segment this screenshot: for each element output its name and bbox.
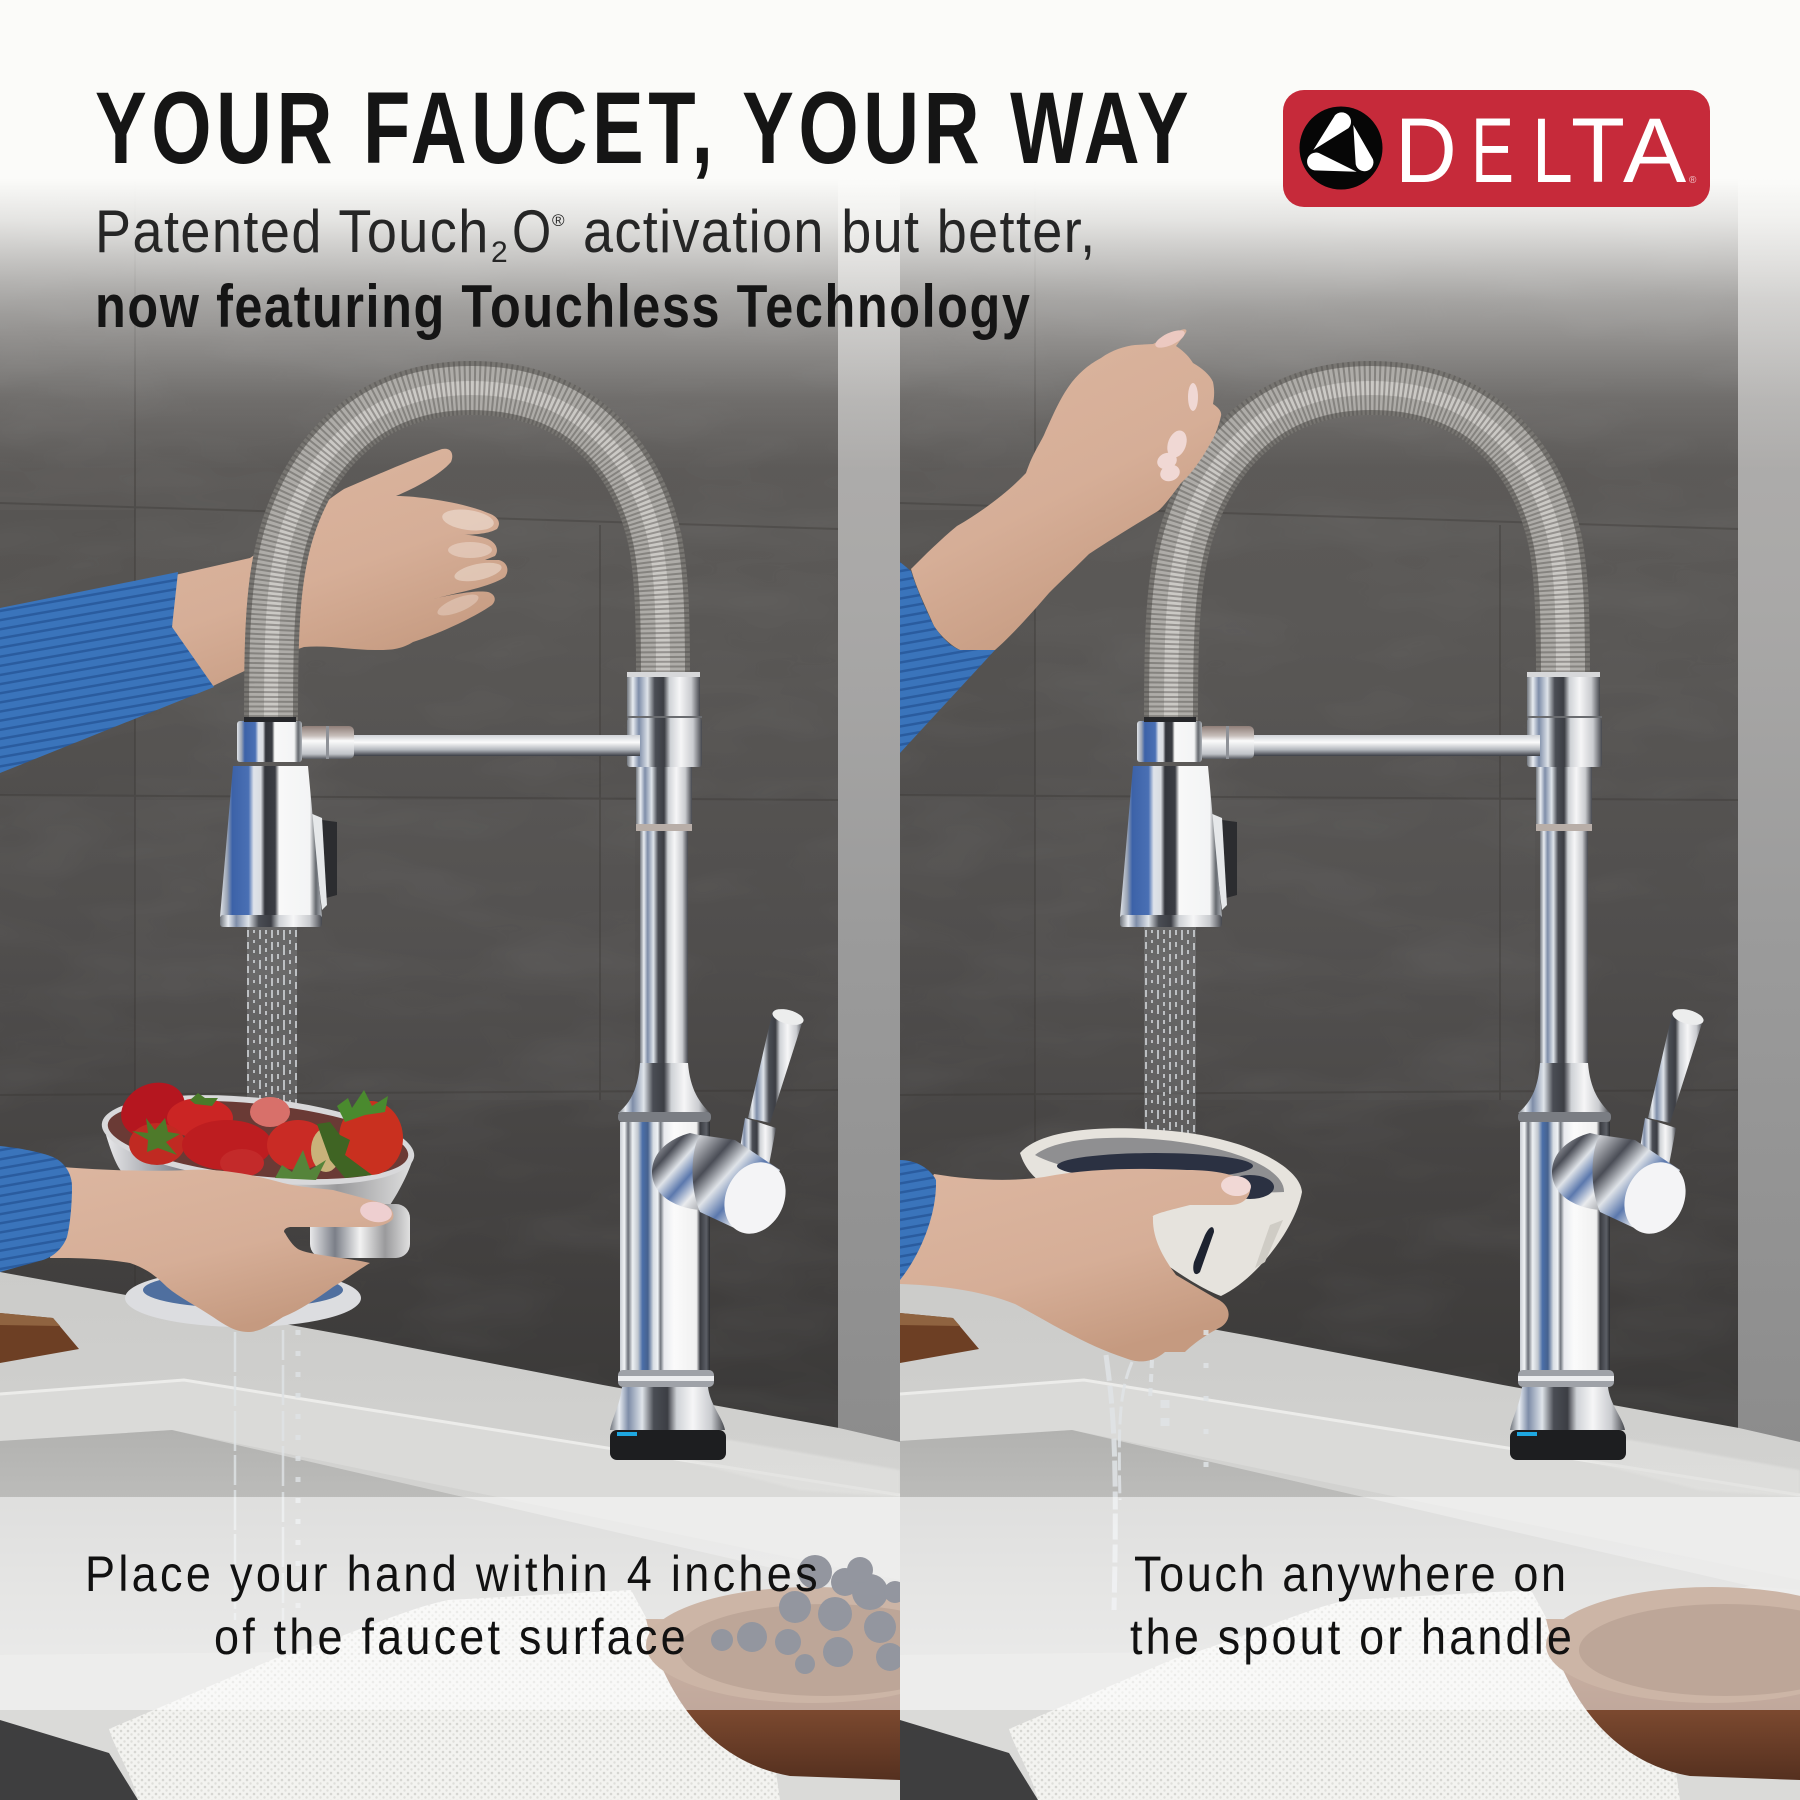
blue sleeve cuff bbox=[0, 1146, 72, 1272]
subtitle bbox=[95, 198, 1095, 340]
hand holding colander bbox=[0, 1146, 393, 1332]
wordmark: L bbox=[1532, 99, 1573, 202]
blue sleeve bbox=[0, 572, 214, 773]
wordmark bbox=[1395, 98, 1687, 202]
strawberry colander bbox=[102, 1082, 414, 1204]
logo: Delta: ® bbox=[1689, 175, 1697, 186]
kitchen backdrop and counter bbox=[900, 150, 1800, 1800]
logo: Delta bbox=[1283, 90, 1710, 207]
panel: touchless activation photo bbox=[0, 192, 900, 1800]
caption band bbox=[900, 1497, 1800, 1710]
ceramic berry bowl bbox=[1020, 1128, 1302, 1296]
colander foot and handle ring bbox=[125, 1204, 410, 1327]
icon: Delta triangle mark bbox=[1300, 106, 1382, 190]
subtitle: 2 bbox=[491, 236, 508, 269]
panel: touch activation photo bbox=[900, 192, 1800, 1800]
arm and hand near spout bbox=[0, 449, 507, 773]
wordmark: T bbox=[1571, 99, 1625, 202]
blueberries bbox=[711, 1555, 906, 1674]
caption: Place your hand within 4 inches bbox=[85, 1547, 818, 1603]
wordmark: E bbox=[1471, 99, 1514, 202]
caption: Touch anywhere on bbox=[1134, 1547, 1566, 1603]
top fade bbox=[900, 150, 1800, 442]
faucet bbox=[1120, 388, 1705, 1460]
kitchen backdrop and counter bbox=[0, 192, 900, 1800]
title: YOUR FAUCET, YOUR WAY bbox=[95, 72, 1189, 186]
water drips bbox=[235, 1330, 298, 1620]
fingernails bbox=[1188, 383, 1198, 411]
blue sleeve bbox=[900, 562, 995, 753]
caption bbox=[1130, 1547, 1572, 1666]
hand holding bowl bbox=[900, 1160, 1252, 1361]
blue sleeve cuff bbox=[900, 1160, 936, 1280]
caption band bbox=[0, 1497, 900, 1710]
caption: of the faucet surface bbox=[214, 1610, 686, 1666]
subtitle: O bbox=[512, 198, 551, 265]
top fade bbox=[0, 150, 900, 442]
faucet bbox=[220, 388, 805, 1460]
caption: the spout or handle bbox=[1130, 1610, 1572, 1666]
water drips bbox=[1106, 1330, 1206, 1610]
caption bbox=[88, 1554, 816, 1654]
fingernail bbox=[360, 1202, 392, 1222]
wordmark: D bbox=[1395, 99, 1457, 202]
subtitle: now featuring Touchless Technology bbox=[95, 273, 1030, 340]
subtitle: Patented Touch bbox=[95, 198, 488, 266]
water spray bbox=[1144, 927, 1196, 1134]
subtitle: ® bbox=[552, 211, 565, 230]
subtitle: activation but better, bbox=[583, 198, 1095, 266]
arm and hand touching hose bbox=[900, 327, 1221, 753]
wordmark: A bbox=[1623, 98, 1687, 202]
water spray bbox=[247, 927, 297, 1103]
fingernail bbox=[1221, 1176, 1251, 1196]
